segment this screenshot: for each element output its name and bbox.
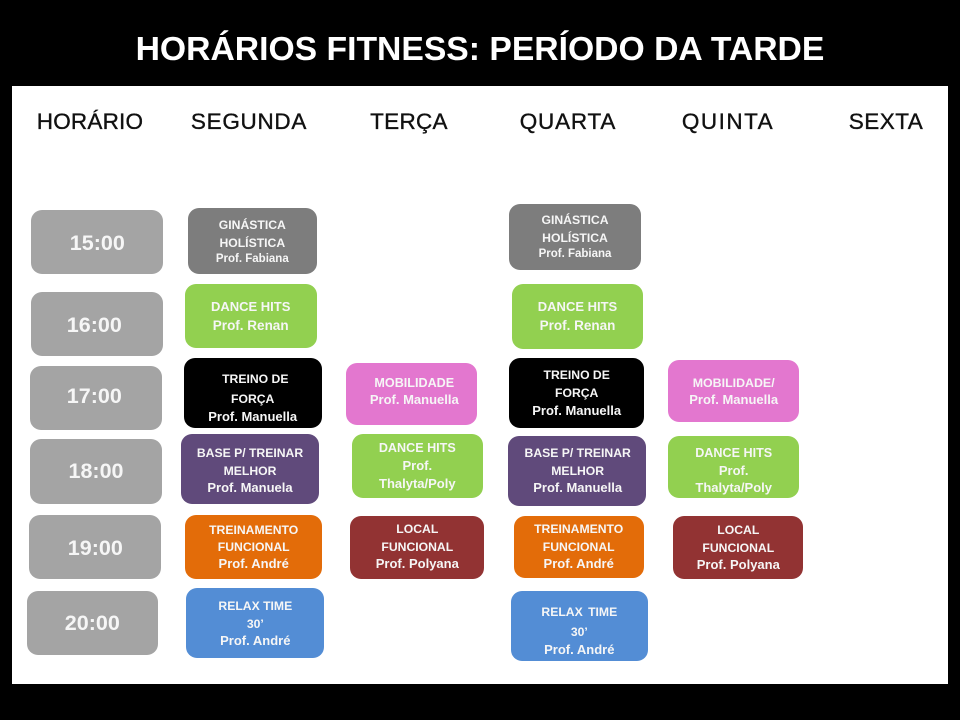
class: segunda 16:00: DANCE HITS [211, 299, 290, 314]
class: terça 19:00 [350, 516, 484, 579]
class: segunda 18:00: BASE P/ TREINAR [197, 446, 303, 460]
time: 20:00 [27, 591, 158, 655]
class: quinta 19:00: Prof. Polyana [697, 557, 780, 572]
class: quinta 17:00: Prof. Manuella [689, 392, 778, 407]
class: quarta 17:00 [509, 358, 644, 428]
class: terça 18:00: Thalyta/Poly [379, 476, 456, 491]
class: quarta 17:00: TREINO DE [544, 368, 610, 382]
class: quinta 17:00 [668, 360, 799, 422]
class: quarta 15:00: Prof. Fabiana [539, 248, 611, 260]
class: segunda 20:00: 30’ [247, 617, 264, 631]
class: quinta 18:00 [668, 436, 799, 498]
class: segunda 18:00 [181, 434, 319, 504]
class: quinta 19:00: FUNCIONAL [702, 541, 774, 555]
class: quarta 15:00 [509, 204, 641, 270]
class: terça 17:00: Prof. Manuella [370, 392, 459, 407]
class: quarta 15:00: HOLÍSTICA [542, 231, 608, 245]
class: quarta 16:00: DANCE HITS [538, 299, 617, 314]
class: quarta 18:00: BASE P/ TREINAR [525, 446, 631, 460]
heading: quinta: QUINTA [682, 109, 774, 134]
class: quarta 19:00: FUNCIONAL [543, 540, 615, 554]
heading: horário: HORÁRIO [37, 109, 143, 134]
class: quarta 20:00 [511, 591, 648, 661]
heading: sexta: SEXTA [849, 109, 923, 134]
class: segunda 15:00: Prof. Fabiana [216, 253, 289, 265]
time: 15:00: 15:00 [70, 231, 125, 255]
class: terça 18:00: DANCE HITS [379, 441, 456, 455]
class: segunda 15:00: HOLÍSTICA [219, 236, 285, 250]
class: quarta 19:00: Prof. André [544, 556, 614, 571]
class: segunda 20:00: Prof. André [220, 633, 290, 648]
heading: quarta: QUARTA [520, 109, 616, 134]
class: segunda 17:00 [184, 358, 322, 428]
time: 20:00: 20:00 [65, 611, 120, 635]
class: terça 18:00: Prof. [402, 458, 432, 473]
class: segunda 17:00: Prof. Manuella [208, 409, 297, 424]
class: segunda 18:00: Prof. Manuela [207, 480, 293, 495]
time: 18:00: 18:00 [68, 459, 124, 483]
time: 15:00 [31, 210, 163, 274]
class: quarta 18:00 [508, 436, 646, 506]
class: segunda 17:00: TREINO DE [222, 372, 288, 386]
class: quinta 19:00 [673, 516, 803, 579]
heading: segunda: SEGUNDA [191, 109, 307, 134]
class: terça 17:00 [346, 363, 477, 425]
time: 17:00 [30, 366, 162, 430]
title: HORÁRIOS FITNESS: PERÍODO DA TARDE [136, 30, 824, 68]
class: segunda 18:00: MELHOR [224, 464, 276, 478]
time: 18:00 [30, 439, 162, 504]
class: quarta 20:00: RELAX TIME [541, 605, 617, 619]
class: terça 19:00: FUNCIONAL [381, 540, 453, 554]
class: terça 17:00: MOBILIDADE [374, 376, 454, 390]
class: segunda 19:00: TREINAMENTO [209, 523, 298, 537]
class: quarta 18:00: MELHOR [551, 464, 604, 478]
class: quarta 16:00: Prof. Renan [540, 318, 615, 333]
heading: terça: TERÇA [370, 109, 448, 134]
class: quarta 17:00: Prof. Manuella [532, 403, 621, 418]
class: quarta 19:00 [514, 516, 644, 578]
class: quinta 17:00: MOBILIDADE/ [693, 376, 775, 390]
class: segunda 19:00: Prof. André [219, 556, 289, 571]
class: segunda 17:00: FORÇA [231, 392, 274, 406]
class: quinta 18:00: DANCE HITS [695, 446, 772, 460]
class: segunda 16:00: Prof. Renan [213, 318, 289, 333]
class: segunda 20:00: RELAX TIME [218, 599, 292, 613]
class: terça 19:00: LOCAL [396, 522, 438, 536]
class: terça 19:00: Prof. Polyana [376, 556, 459, 571]
time: 16:00: 16:00 [67, 313, 122, 337]
class: quarta 20:00: 30’ [571, 625, 588, 639]
time: 17:00: 17:00 [67, 384, 122, 408]
class: quarta 15:00: GINÁSTICA [541, 213, 609, 227]
class: quarta 16:00 [512, 284, 643, 349]
class: terça 18:00 [352, 434, 483, 498]
class: segunda 16:00 [185, 284, 317, 348]
class: quarta 19:00: TREINAMENTO [534, 522, 623, 536]
class: quinta 18:00: Thalyta/Poly [695, 480, 772, 495]
class: quarta 18:00: Prof. Manuella [533, 480, 622, 495]
time: 19:00: 19:00 [68, 536, 123, 560]
class: segunda 15:00 [188, 208, 317, 274]
time: 16:00 [31, 292, 163, 356]
class: segunda 19:00 [185, 515, 322, 579]
class: quinta 19:00: LOCAL [717, 523, 759, 537]
class: quarta 17:00: FORÇA [555, 386, 598, 400]
class: quinta 18:00: Prof. [719, 463, 748, 478]
time: 19:00 [29, 515, 161, 579]
class: segunda 19:00: FUNCIONAL [218, 540, 290, 554]
class: segunda 15:00: GINÁSTICA [219, 218, 286, 232]
class: segunda 20:00 [186, 588, 324, 658]
class: quarta 20:00: Prof. André [544, 642, 614, 657]
